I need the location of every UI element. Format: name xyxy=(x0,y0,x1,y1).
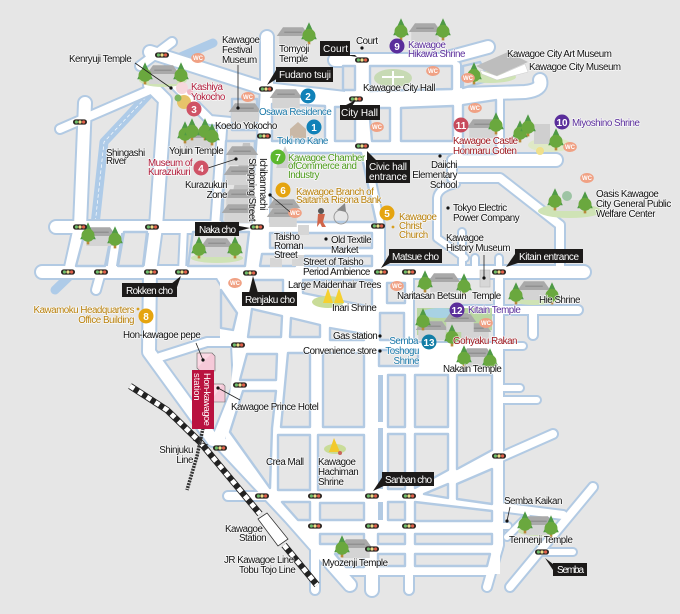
leader lines and location dots xyxy=(135,46,510,523)
place name labels: Shopping Street xyxy=(246,158,257,222)
place name labels: Hachiman xyxy=(318,467,358,478)
Hon-kawagoe station label: station xyxy=(192,373,203,401)
intersection label: City Hall: City Hall xyxy=(341,108,378,119)
place name labels: Koedo Yokocho xyxy=(215,121,278,132)
place name labels: Hikawa Shrine xyxy=(408,49,466,60)
place name labels: Ichibanmachi xyxy=(257,158,268,210)
place name labels: Kawagoe Prince Hotel xyxy=(231,402,319,413)
place name labels: Naritasan Betsuin xyxy=(397,291,466,302)
Hon-kawagoe station label xyxy=(192,370,214,429)
intersection label: Court: Court xyxy=(323,44,348,55)
place name labels: Festival xyxy=(222,45,252,56)
place name labels: Church xyxy=(399,230,428,241)
intersection label: Sanban cho: Sanban cho xyxy=(385,475,432,486)
icon: Hon-kawagoe pepe building xyxy=(197,353,215,371)
place name labels: Tobu Tojo Line xyxy=(239,565,296,576)
place name labels: Convenience store xyxy=(303,346,378,357)
WC markers xyxy=(191,53,594,328)
place name labels: Yojuin Temple xyxy=(169,146,224,157)
numbered markers: 6 xyxy=(280,186,286,197)
intersection label: Fudano tsuji xyxy=(267,67,333,85)
numbered markers: 5 xyxy=(384,209,390,220)
intersection label: Court xyxy=(320,41,357,57)
icon: Chamber of Commerce building xyxy=(276,146,294,168)
icon: Oasis Kawagoe xyxy=(538,188,602,218)
place name labels: Power Company xyxy=(453,213,520,224)
intersection label: Fudano tsuji: Fudano tsuji xyxy=(279,70,331,81)
icon: Yojuin Temple xyxy=(177,118,220,148)
intersection label: Rokken cho xyxy=(122,276,181,297)
place name labels: History Museum xyxy=(446,243,510,254)
icon: Risona Bank building xyxy=(267,199,300,227)
place name labels: Kawagoe Chamber xyxy=(288,153,366,164)
place name labels: Shingashi xyxy=(106,148,145,159)
place name labels: Shrine xyxy=(394,356,420,367)
place name labels: Semba xyxy=(389,336,419,347)
intersection label: City Hall xyxy=(340,100,380,120)
place name labels: Kawamoku Headquarters xyxy=(34,305,135,316)
place name labels: Industry xyxy=(288,170,320,181)
place name labels: Yokocho xyxy=(191,92,226,103)
icon: Kurazukuri Zone buildings xyxy=(222,143,258,223)
place name labels: Toki no Kane xyxy=(277,136,329,147)
place name labels: Taisho xyxy=(274,232,300,243)
place name labels: Kawagoe Castle xyxy=(453,136,519,147)
place name labels: Kawagoe xyxy=(399,212,438,223)
place name labels: Tokyo Electric xyxy=(453,203,507,214)
icon: Taisho Roman buildings xyxy=(270,225,309,267)
intersection label: Semba: Semba xyxy=(557,565,584,576)
place name labels: School xyxy=(430,180,457,191)
place name labels: River xyxy=(106,156,128,167)
place name labels: Nakain Temple xyxy=(443,364,502,375)
Hon-kawagoe station label: Hon-kawagoe xyxy=(202,373,213,426)
numbered markers: 10 xyxy=(556,118,568,129)
place name labels: Kawagoe City Hall xyxy=(363,83,435,94)
numbered markers: 7 xyxy=(275,153,281,164)
icon: Tomyoji Temple xyxy=(277,22,317,46)
Kawagoe Station building xyxy=(258,513,288,546)
place name labels: Hon-kawagoe pepe xyxy=(123,330,201,341)
place name labels: Kurazukuri xyxy=(148,167,190,178)
place name labels: Hie Shrine xyxy=(539,295,581,306)
icon: Kawagoe Castle Honmaru Goten xyxy=(467,112,504,138)
place name labels: Inari Shrine xyxy=(332,303,377,314)
numbered markers: 3 xyxy=(191,105,197,116)
icon: Kawagoe Festival Museum xyxy=(229,103,261,122)
place name labels: Tomyoji xyxy=(279,44,309,55)
icon: Kawagoe Prince Hotel building xyxy=(212,384,225,402)
place name labels: Daiichi xyxy=(431,160,457,171)
numbered markers: 1 xyxy=(311,123,317,134)
icon: Nakain Temple xyxy=(456,345,498,370)
intersection label: Matsue cho xyxy=(381,249,442,268)
place name labels: Kenryuji Temple xyxy=(69,54,132,65)
icon: Kenryuji Temple xyxy=(137,62,189,87)
blue side stripes along Sanban street xyxy=(378,375,383,520)
place name labels: Myozenji Temple xyxy=(322,558,389,569)
place name labels: Crea Mall xyxy=(266,457,304,468)
place name labels: Kawagoe xyxy=(225,524,264,535)
place name labels: Temple xyxy=(472,291,502,302)
place name labels: Street xyxy=(274,250,298,261)
icon: rickshaw xyxy=(317,203,348,227)
icon: Tennenji Temple xyxy=(517,511,559,537)
icon: Kashiya Yokocho sweets xyxy=(174,82,193,109)
place name labels: Old Textile xyxy=(331,235,372,246)
icon: Naritasan Betsuin xyxy=(417,270,472,295)
intersection label: Rokken cho: Rokken cho xyxy=(126,286,173,297)
place name labels: Line xyxy=(176,455,194,466)
intersection label: Kitain entrance xyxy=(506,249,583,267)
intersection label: Kitain entrance: Kitain entrance xyxy=(519,252,579,263)
place name labels: Office Building xyxy=(78,315,134,326)
icon: Toki no Kane xyxy=(290,122,306,138)
railway: Tobu Tojo and JR Kawagoe Line xyxy=(130,386,317,585)
place name labels: Gohyaku Rakan xyxy=(453,336,517,347)
place name labels: Zone xyxy=(207,190,228,201)
icon: Kawagoe City Art Museum and City Museum xyxy=(464,52,528,84)
place name labels: Period Ambience xyxy=(303,267,371,278)
icon: Miyoshino Shrine xyxy=(512,114,572,155)
intersection label: Renjaku cho xyxy=(242,276,297,306)
numbered markers: 8 xyxy=(143,312,149,323)
place name labels: Kitain Temple xyxy=(468,305,521,316)
place name labels: Honmaru Goten xyxy=(453,146,516,157)
place name labels: Toshogu xyxy=(385,346,419,357)
icon: Hie Shrine xyxy=(508,281,560,305)
place name labels: Welfare Center xyxy=(596,209,656,220)
icon: Kawagoe Hachiman Shrine xyxy=(324,438,346,455)
intersection label: Matsue cho: Matsue cho xyxy=(392,252,439,263)
numbered markers: 13 xyxy=(423,338,435,349)
icon: Kawagoe History Museum xyxy=(480,270,490,287)
intersection label: Sanban cho xyxy=(373,472,434,491)
place name labels: Oasis Kawagoe xyxy=(596,189,659,200)
place name labels: Gas station xyxy=(333,331,377,342)
place name labels: Kawagoe xyxy=(446,233,485,244)
numbered markers xyxy=(138,38,570,350)
place name labels: Kawagoe Branch of xyxy=(296,187,374,198)
place name labels: Kawagoe City Art Museum xyxy=(507,49,612,60)
icon: Myozenji Temple xyxy=(334,535,372,558)
intersection label: Semba xyxy=(545,558,587,576)
icon: Large Maidenhair Trees xyxy=(312,288,344,308)
place name labels: City General Public xyxy=(596,199,671,210)
intersection label: Naka cho: Naka cho xyxy=(199,225,236,236)
place name labels: Station xyxy=(239,533,266,544)
road network outlines and surfaces xyxy=(42,37,593,590)
place name labels: Miyoshino Shrine xyxy=(572,118,640,129)
place name labels: Large Maidenhair Trees xyxy=(288,280,381,291)
icon: Osawa Residence xyxy=(270,89,302,108)
place name labels: Street of Taisho xyxy=(303,257,364,268)
intersection label: Civic hall entrance: entrance xyxy=(369,172,407,183)
place name labels: Court xyxy=(356,36,378,47)
numbered markers: 4 xyxy=(198,164,204,175)
icon: City Hall grounds xyxy=(374,69,412,87)
intersection label: Civic hall entrance: Civic hall xyxy=(369,162,407,173)
intersection label: Renjaku cho: Renjaku cho xyxy=(245,295,295,306)
railway: Seibu Shinjuku Line xyxy=(187,428,203,490)
icon: Kitain Temple and Gohyaku Rakan xyxy=(415,308,492,346)
place name labels: Osawa Residence xyxy=(259,107,332,118)
numbered markers: 11 xyxy=(456,121,467,132)
icon: Myosyoji Temple xyxy=(80,222,123,248)
place name labels: Saitama Risona Bank xyxy=(296,195,382,206)
place name labels: JR Kawagoe Line xyxy=(224,555,295,566)
intersection label: Civic hall entrance xyxy=(366,151,410,183)
place name labels: Museum of xyxy=(148,158,193,169)
numbered markers: 9 xyxy=(394,42,400,53)
traffic signals xyxy=(61,52,549,555)
place name labels: Museum xyxy=(222,55,257,66)
place name labels: Shrine xyxy=(318,477,344,488)
place name labels: Kawagoe xyxy=(408,40,447,51)
numbered markers: 12 xyxy=(451,306,463,317)
icon: Kawagoe Hikawa Shrine xyxy=(393,18,451,42)
place name labels: Semba Kaikan xyxy=(504,496,562,507)
place name labels: Elementary xyxy=(412,170,458,181)
place name labels: Kurazukuri xyxy=(185,180,227,191)
place name labels: Christ xyxy=(399,221,422,232)
place name labels: Kawagoe City Museum xyxy=(529,62,621,73)
place name labels: Roman xyxy=(274,241,303,252)
place name labels: Kawagoe xyxy=(318,457,357,468)
place name labels: ofCommerce and xyxy=(288,161,356,172)
numbered markers: 2 xyxy=(305,92,311,103)
place name labels: Kawagoe xyxy=(222,35,261,46)
place name labels: Market xyxy=(331,245,359,256)
place name labels: Temple xyxy=(279,54,309,65)
place name labels: Tennenji Temple xyxy=(509,535,573,546)
city blocks xyxy=(76,62,496,567)
place name labels: Shinjuku xyxy=(159,445,193,456)
icon: Renkeiji Temple xyxy=(191,236,243,263)
intersection label: Naka cho xyxy=(195,222,250,236)
place name labels: Kashiya xyxy=(191,82,224,93)
Shingashi River xyxy=(55,43,213,290)
